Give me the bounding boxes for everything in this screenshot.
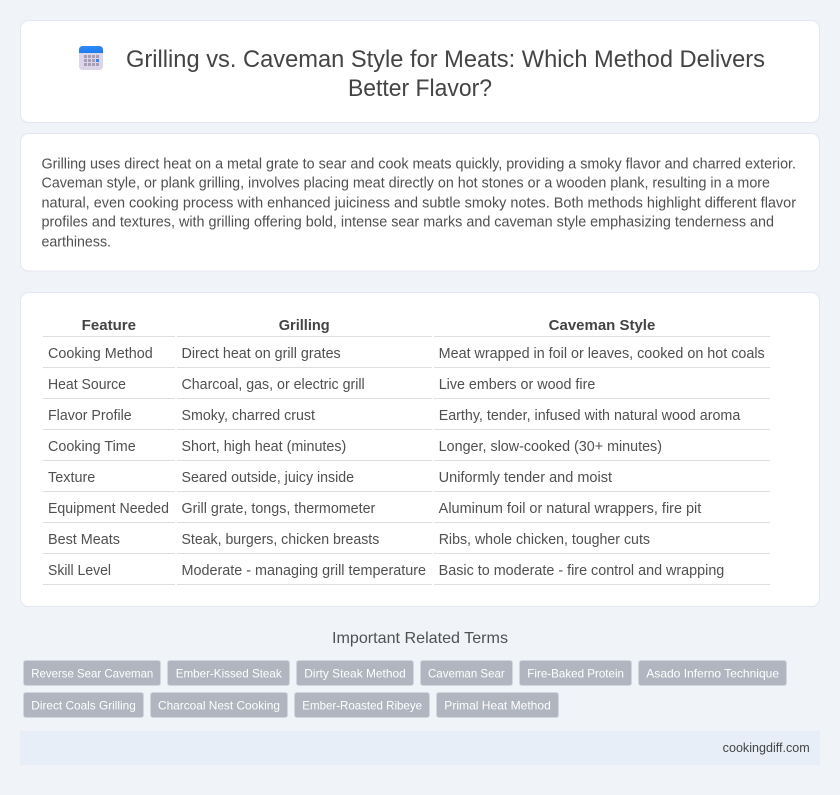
tag: ember-kissed steak: Ember-Kissed Steak bbox=[176, 666, 283, 680]
tag: ember-roasted ribeye bbox=[294, 692, 430, 718]
row: heat source: Heat Source bbox=[48, 377, 126, 393]
row: equipment needed: Aluminum foil or natural wrappers, fire pit bbox=[439, 501, 701, 517]
row: heat source: Charcoal, gas, or electric grill bbox=[182, 377, 365, 393]
row: heat source: Live embers or wood fire bbox=[439, 377, 595, 393]
table header: Feature bbox=[82, 318, 136, 334]
tag: primal heat method: Primal Heat Method bbox=[444, 698, 551, 712]
row: texture: Texture bbox=[48, 470, 95, 486]
tag: ember-roasted ribeye: Ember-Roasted Ribeye bbox=[302, 698, 422, 712]
tag: reverse sear caveman: Reverse Sear Caveman bbox=[31, 666, 153, 680]
footer source text: cookingdiff.com bbox=[723, 741, 810, 755]
row: texture bbox=[48, 470, 612, 486]
row: best meats: Best Meats bbox=[48, 532, 120, 548]
tags: related terms bbox=[24, 660, 786, 718]
row: skill level bbox=[48, 563, 724, 579]
row: skill level: Moderate - managing grill temperature bbox=[182, 563, 426, 579]
row: heat source bbox=[48, 377, 595, 393]
row: cooking time: Longer, slow-cooked (30+ minutes) bbox=[439, 439, 662, 455]
row: texture: Seared outside, juicy inside bbox=[182, 470, 354, 486]
tag: direct coals grilling: Direct Coals Grilling bbox=[31, 698, 136, 712]
title: Better Flavor? bbox=[348, 75, 492, 102]
tag: direct coals grilling bbox=[24, 692, 144, 718]
tag: ember-kissed steak bbox=[168, 660, 290, 686]
table header bbox=[82, 318, 655, 334]
title: Grilling vs. Caveman Style for Meats: Which Method Delivers bbox=[126, 46, 765, 73]
icon: calendar bbox=[79, 46, 103, 70]
text block: description paragraph: Grilling uses direct heat on a metal grate to sear and cook meats quickly, providing a smoky flavor and charred exterior. bbox=[42, 156, 796, 172]
tag: charcoal nest cooking bbox=[150, 692, 288, 718]
tag: caveman sear bbox=[420, 660, 512, 686]
row: skill level: Skill Level bbox=[48, 563, 111, 579]
row: skill level: Basic to moderate - fire control and wrapping bbox=[439, 563, 724, 579]
row: cooking method bbox=[48, 346, 765, 362]
row: equipment needed: Grill grate, tongs, thermometer bbox=[182, 501, 376, 517]
tag: reverse sear caveman bbox=[24, 660, 160, 686]
tag: fire-baked protein: Fire-Baked Protein bbox=[527, 666, 624, 680]
tag: asado inferno technique bbox=[638, 660, 786, 686]
row: cooking time bbox=[48, 439, 662, 455]
row: best meats bbox=[48, 532, 650, 548]
panel: description bbox=[20, 134, 820, 271]
footer bbox=[20, 731, 820, 765]
tag: primal heat method bbox=[436, 692, 558, 718]
tag: caveman sear: Caveman Sear bbox=[428, 666, 505, 680]
row: cooking method: Cooking Method bbox=[48, 346, 153, 362]
tag: dirty steak method: Dirty Steak Method bbox=[304, 666, 406, 680]
row: texture: Uniformly tender and moist bbox=[439, 470, 612, 486]
row: equipment needed: Equipment Needed bbox=[48, 501, 169, 517]
row: cooking time: Short, high heat (minutes) bbox=[182, 439, 346, 455]
text block: description paragraph: profiles and textures, with grilling offering bold, intense sear marks and caveman style emphasizing tenderness and bbox=[42, 215, 774, 231]
tag: charcoal nest cooking: Charcoal Nest Cooking bbox=[158, 698, 280, 712]
row: cooking time: Cooking Time bbox=[48, 439, 136, 455]
row: best meats: Steak, burgers, chicken breasts bbox=[182, 532, 379, 548]
tag: dirty steak method bbox=[296, 660, 414, 686]
row: flavor profile: Flavor Profile bbox=[48, 408, 132, 424]
row: equipment needed bbox=[48, 501, 701, 517]
panel: comparison table bbox=[20, 292, 820, 606]
panel: title card bbox=[20, 20, 820, 122]
heading: important related terms: Important Related Terms bbox=[332, 630, 508, 647]
row: flavor profile: Earthy, tender, infused with natural wood aroma bbox=[439, 408, 740, 424]
row: cooking method: Direct heat on grill grates bbox=[182, 346, 341, 362]
row: cooking method: Meat wrapped in foil or leaves, cooked on hot coals bbox=[439, 346, 765, 362]
text block: description paragraph: natural, even cooking process with enhanced juiciness and subtle smoky notes. Both methods highlight different flavor bbox=[42, 195, 796, 211]
text block: description paragraph: Caveman style, or plank grilling, involves placing meat directly on hot stones or a wooden plank, resulting in a more bbox=[42, 176, 770, 192]
row: flavor profile: Smoky, charred crust bbox=[182, 408, 315, 424]
text block: description paragraph: earthiness. bbox=[42, 234, 111, 250]
tag: fire-baked protein bbox=[520, 660, 632, 686]
text block: description paragraph bbox=[42, 156, 796, 250]
row: flavor profile bbox=[48, 408, 740, 424]
tag: asado inferno technique: Asado Inferno Technique bbox=[646, 666, 779, 680]
table header: Grilling bbox=[279, 318, 330, 334]
table header: Caveman Style bbox=[549, 318, 655, 334]
title bbox=[126, 46, 765, 102]
row: best meats: Ribs, whole chicken, tougher cuts bbox=[439, 532, 650, 548]
